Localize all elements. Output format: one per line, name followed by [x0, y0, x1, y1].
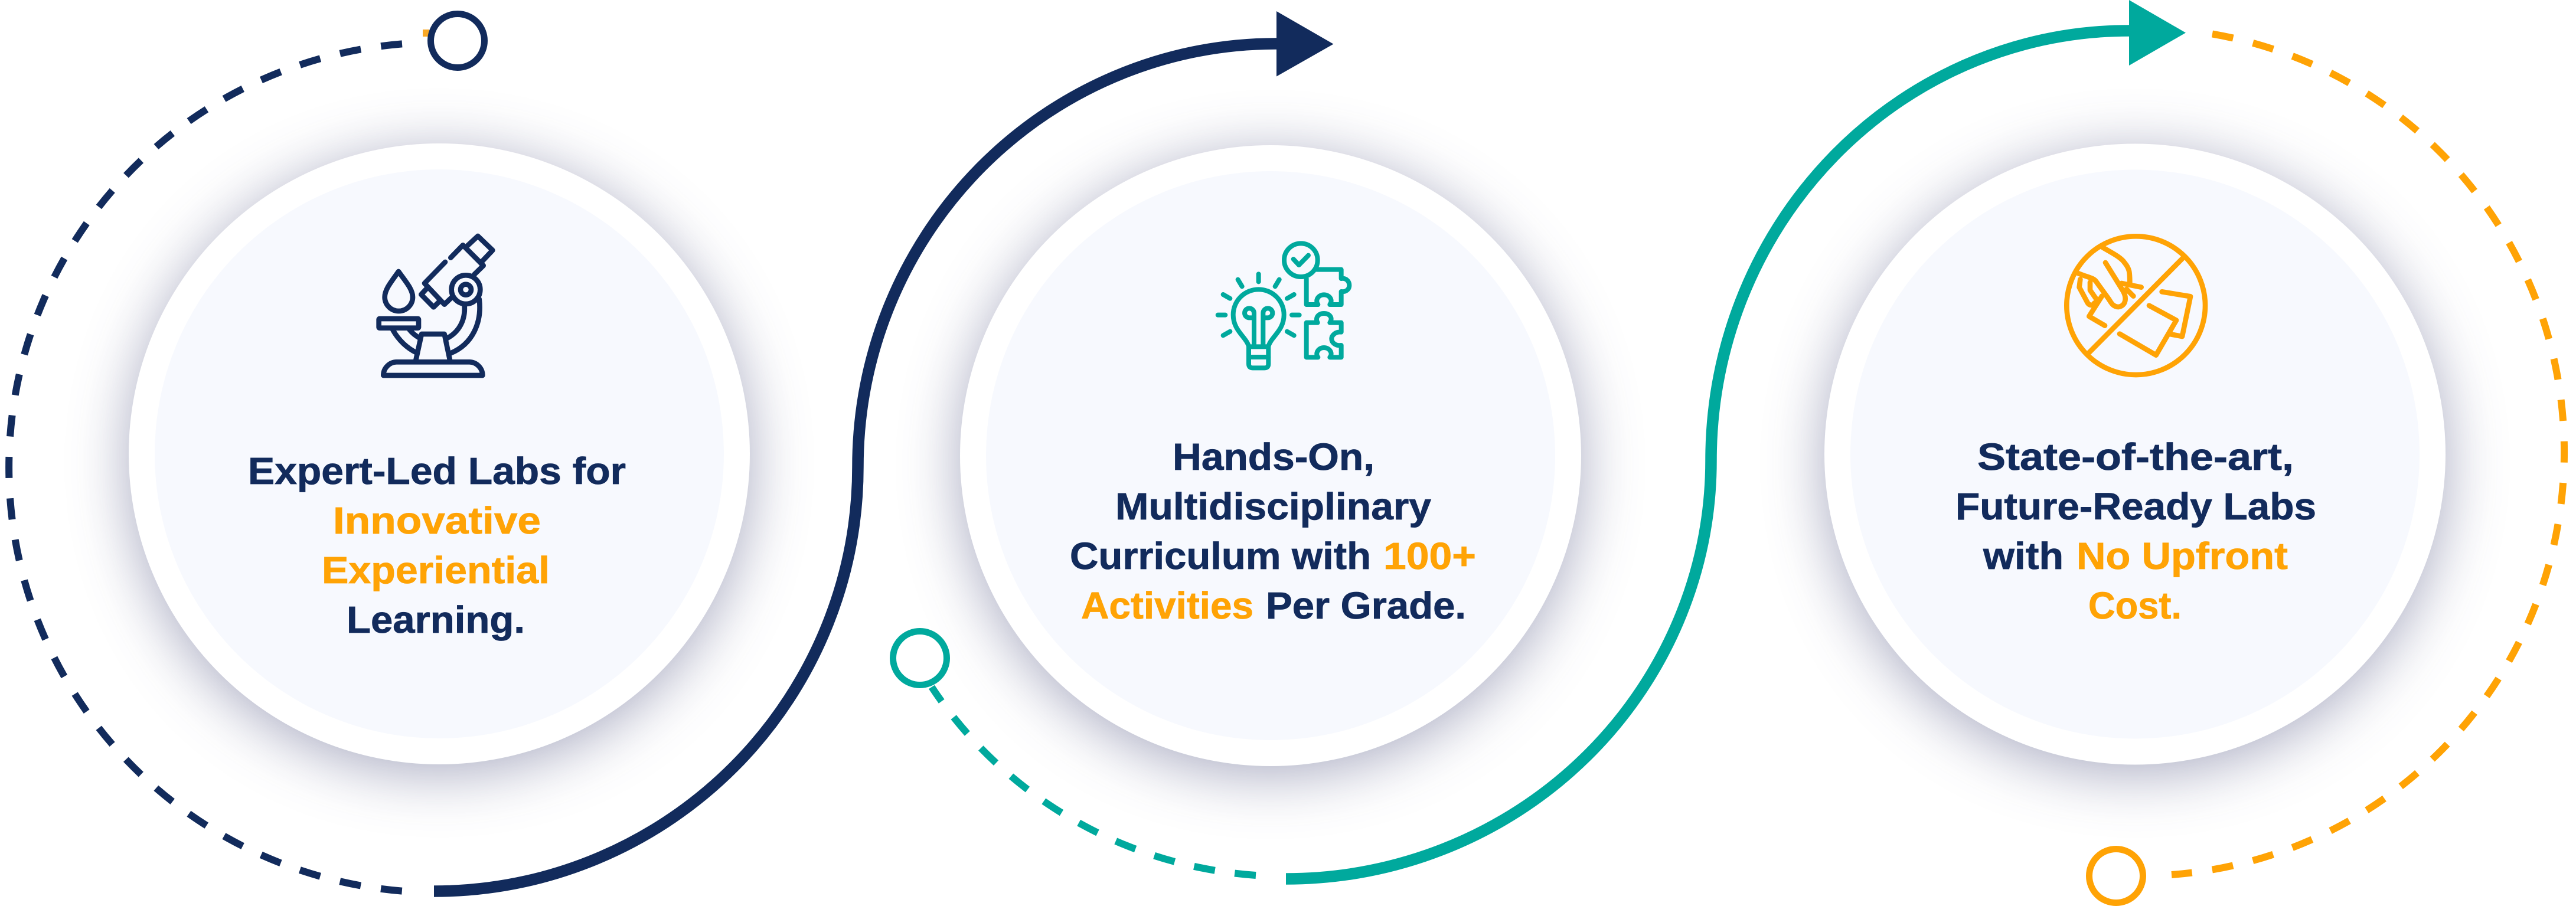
circle card 2 inner disc — [986, 171, 1555, 740]
text: card 3 statement: Cost. — [2088, 584, 2182, 627]
panel: Expert-led labs — [129, 143, 750, 764]
icon: microscope — [379, 236, 492, 375]
text: card 2 statement: Activities — [1081, 584, 1253, 627]
text: card 2 statement: Hands-On, — [1173, 436, 1374, 478]
icon: light bulb and puzzle pieces — [1218, 243, 1349, 368]
text: card 2 statement: Multidisciplinary — [1115, 485, 1431, 528]
text: card 3 statement: State-of-the-art, — [1977, 436, 2294, 478]
icon: no money prohibition — [2066, 236, 2205, 375]
circle card 3 inner disc — [1850, 170, 2420, 739]
text: card 1 statement — [248, 450, 626, 641]
circle card 1 outer ring — [129, 143, 750, 764]
circle card 3 outer ring — [1824, 144, 2446, 765]
text: card 2 statement — [1070, 436, 1476, 627]
connector: navy dashed arc with start circle — [9, 14, 485, 891]
connector: teal dashed arc with start circle — [893, 632, 1256, 875]
text: card 1 statement: Expert-Led Labs for — [248, 450, 626, 492]
text: card 3 statement: with — [1983, 535, 2064, 577]
arrow: teal S-curve — [1286, 0, 2186, 879]
text: card 2 statement: Curriculum with — [1070, 535, 1371, 577]
text: card 2 statement: 100+ — [1383, 535, 1476, 577]
text: card 3 statement: Future-Ready Labs — [1955, 485, 2316, 528]
text: card 3 statement: No Upfront — [2077, 535, 2288, 577]
panel: hands-on curriculum — [960, 145, 1581, 766]
arrow: navy S-curve — [434, 11, 1333, 891]
text: card 1 statement: Learning. — [347, 598, 525, 641]
connector: orange dashed arc with end circle — [2089, 34, 2564, 903]
circle card 2 outer ring — [960, 145, 1581, 766]
panel: future-ready labs — [1824, 144, 2446, 765]
text: card 3 statement — [1955, 436, 2316, 627]
text: card 2 statement: Per Grade. — [1266, 584, 1466, 627]
circle card 1 inner disc — [155, 169, 724, 738]
text: card 1 statement: Innovative — [333, 499, 541, 542]
text: card 1 statement: Experiential — [322, 549, 550, 591]
